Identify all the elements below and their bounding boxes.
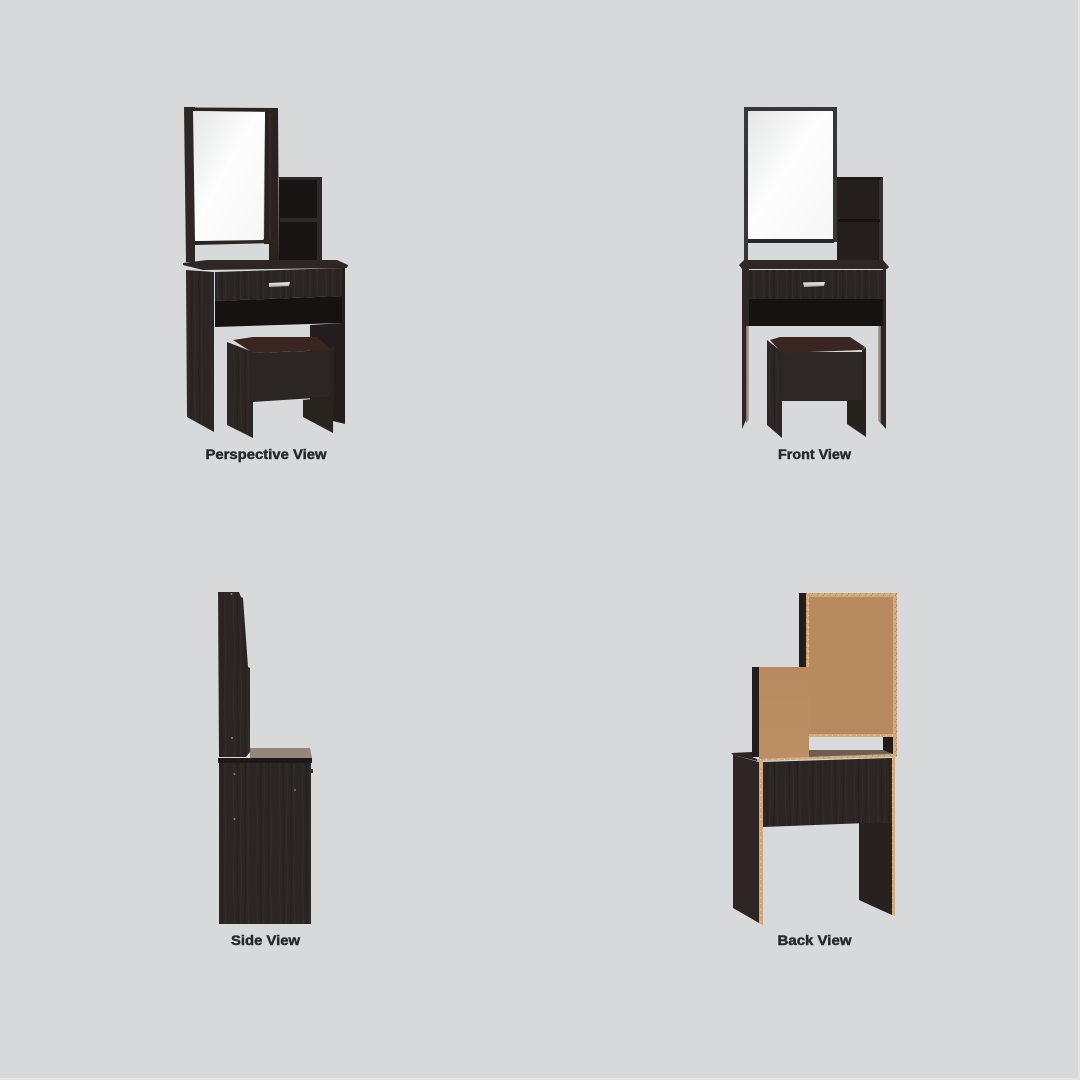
label: side view: Side View: [231, 933, 301, 948]
left top back: [731, 752, 757, 761]
left leg back: [733, 755, 759, 923]
shelf panel back: [752, 667, 809, 759]
panel: back view: [731, 593, 897, 948]
label: perspective view: Perspective View: [206, 447, 327, 462]
dark post back: [799, 593, 806, 668]
drawer front: [746, 270, 883, 299]
right leg perspective: [310, 268, 345, 424]
panel: perspective view: [183, 107, 348, 462]
table top surface back: [809, 750, 893, 757]
shelf unit perspective: [279, 177, 322, 262]
label: front view: Front View: [778, 447, 852, 462]
top strip side: [218, 758, 312, 763]
left cork edge back: [759, 760, 763, 925]
panel: front view: [739, 107, 889, 462]
label: back view: Back View: [778, 933, 852, 948]
right cork edge back: [892, 757, 895, 916]
screws side: [230, 593, 296, 820]
table top side: [250, 748, 312, 758]
opening perspective: [215, 296, 342, 327]
table top front: [739, 260, 889, 269]
mirror perspective: [193, 111, 265, 241]
mirror frame perspective: [184, 107, 279, 262]
mirror front: [748, 111, 833, 239]
shelf unit front: [837, 177, 883, 262]
body side: [219, 763, 311, 924]
table top perspective: [183, 260, 348, 270]
right leg front: [878, 269, 886, 429]
gap block back: [883, 737, 893, 754]
left leg front: [742, 269, 749, 429]
top edge back: [757, 754, 897, 761]
handle front: [803, 282, 825, 287]
left leg perspective: [186, 270, 214, 432]
handle perspective: [269, 282, 290, 287]
drawer perspective: [215, 268, 343, 301]
stool front: [767, 337, 866, 438]
mirror frame front: [744, 107, 837, 263]
upper section side: [218, 592, 250, 757]
back panel: [763, 758, 892, 827]
opening front: [746, 299, 883, 326]
right leg back: [859, 822, 892, 915]
handle side: [311, 769, 313, 773]
stool perspective: [227, 337, 334, 438]
panel: side view: [218, 592, 313, 948]
mirror board back: [806, 593, 897, 755]
